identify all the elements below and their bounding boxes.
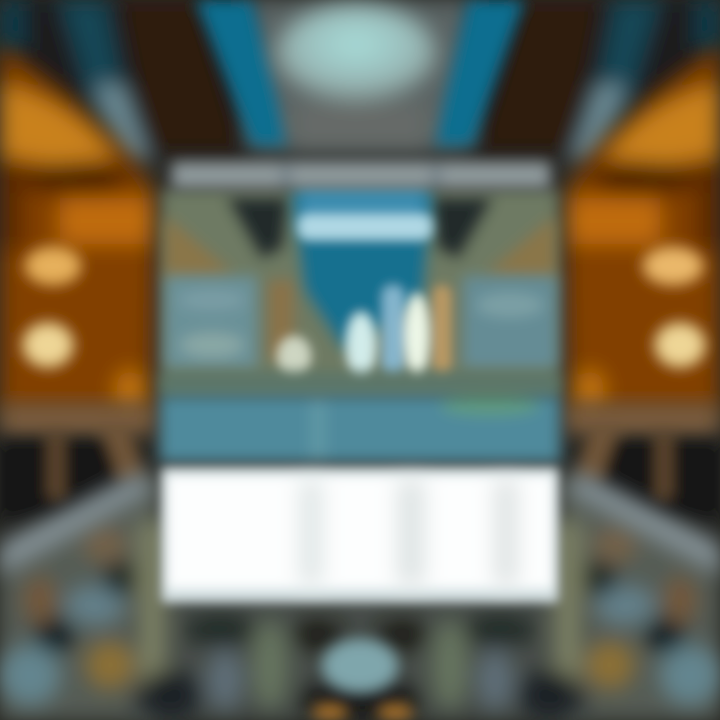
central blue panel [292,190,432,350]
floor [0,470,720,720]
horizontal grey beam [172,162,550,188]
left orange wall [0,45,155,410]
left window panel [165,276,257,368]
ceiling light [276,4,436,146]
floor: diagonal grey rails [0,472,720,575]
ceiling [0,0,720,160]
floor medallion [312,639,413,720]
floor mottling [0,520,720,720]
white panel [162,468,558,602]
dark triangles and arches [165,198,555,360]
right orange wall [565,45,720,410]
dim strip [160,372,560,396]
right window panel [463,276,557,368]
lower side walls [0,404,720,434]
wall lamps [23,247,705,367]
teal band [160,396,560,462]
ceiling: blue strips [196,0,524,145]
lower side wall posts [0,425,720,520]
central light heading blob [298,214,432,240]
central back wall [162,190,558,395]
central lights [277,285,451,378]
